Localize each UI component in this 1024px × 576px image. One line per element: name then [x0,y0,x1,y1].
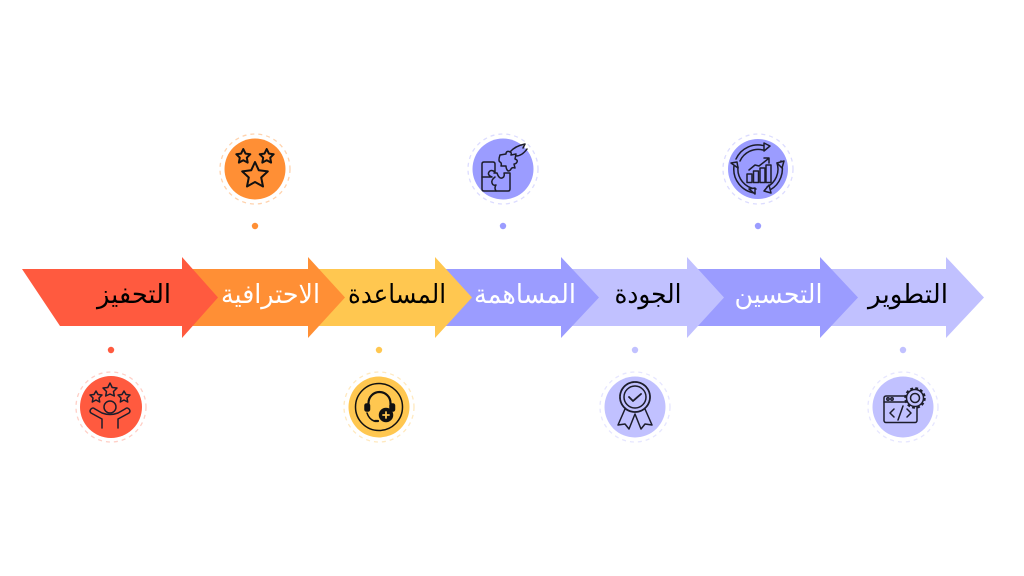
arrow: المساعدة [308,257,472,338]
arrow: التحسين [687,257,858,338]
icon: headset support [344,372,414,442]
icon: growth cycle chart [723,134,793,204]
marker dot: التحفيز [108,347,114,353]
marker dot: الجودة [632,347,638,353]
marker dot: المساعدة [376,347,382,353]
icon: person with stars [76,372,146,442]
arrow: التحفيز [22,257,218,338]
marker dot: الاحترافية [252,223,258,229]
label: التحفيز: التحفيز [95,280,171,310]
label: الاحترافية: الاحترافية [221,280,320,310]
arrow: الاحترافية [182,257,345,338]
icon: puzzle pieces [468,134,538,204]
arrow: المساهمة [435,257,599,338]
marker dot: التحسين [755,223,761,229]
label: المساهمة: المساهمة [474,280,576,310]
label: الجودة: الجودة [614,280,682,310]
marker dot: المساهمة [500,223,506,229]
arrow: الجودة [561,257,724,338]
icon: three stars [220,134,290,204]
arrow: التطوير [820,257,984,338]
icon: award ribbon [600,372,670,442]
label: المساعدة: المساعدة [348,280,446,310]
icon: code window with gear [868,372,938,442]
marker dot: التطوير [900,347,906,353]
label: التحسين: التحسين [734,280,822,310]
label: التطوير: التطوير [866,280,948,310]
